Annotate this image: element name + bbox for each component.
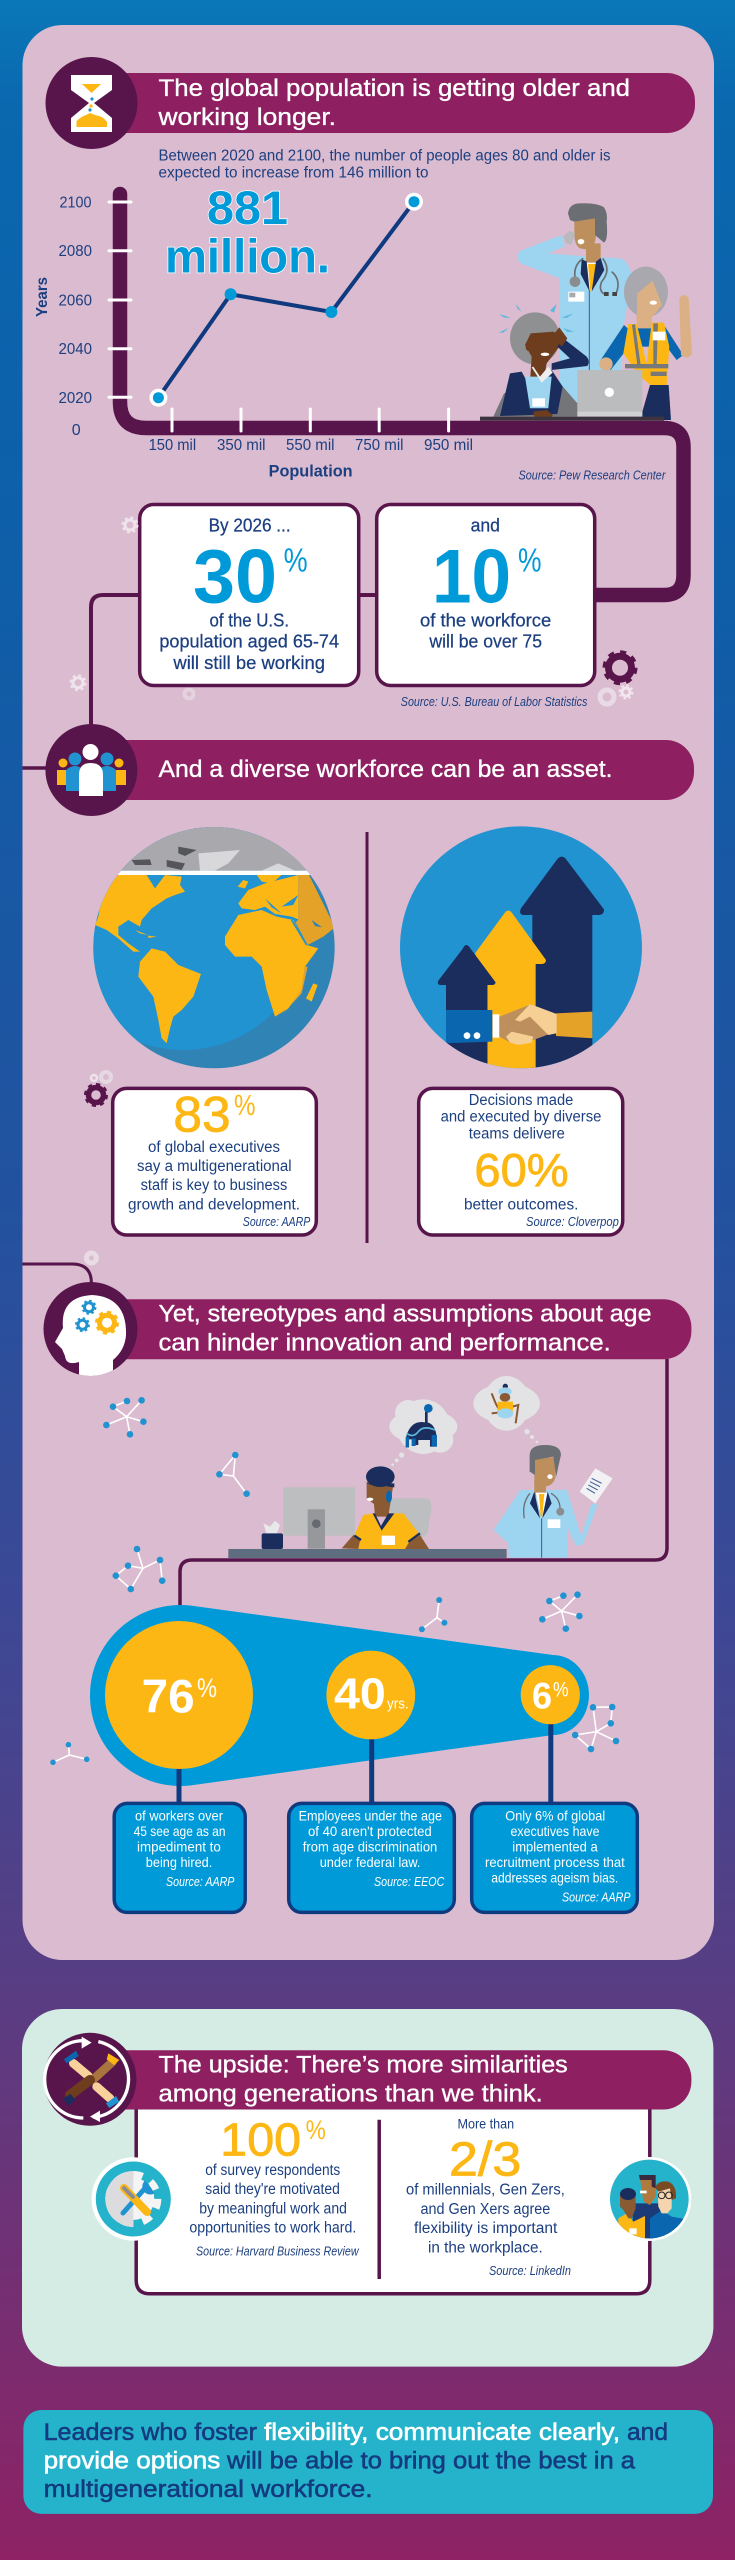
heading text: The global population is getting older and (158, 75, 630, 102)
text box: employees under 40 (289, 1803, 454, 1912)
stat: 100 percent: of survey respondents (205, 2162, 341, 2179)
thought bubble: dinosaur (389, 1399, 457, 1466)
chart: tapering funnel of statistics (90, 1605, 619, 1802)
callout: closing message (23, 2410, 713, 2514)
stat: 100 percent: said they're motivated (205, 2181, 340, 2198)
callout: closing message: multigenerational workforce. (44, 2476, 373, 2503)
stat box: 60 percent (419, 1088, 623, 1235)
icon: gear with tools (92, 2157, 175, 2241)
stat box: 83 percent: of global executives (148, 1139, 280, 1156)
illustration: globe (93, 827, 335, 1068)
thought bubble: baby (473, 1376, 540, 1443)
data line (149, 193, 423, 407)
stat: 100 percent: % (306, 2115, 326, 2145)
circle: 6 percent (521, 1665, 580, 1724)
stat box: 30 percent: 30 (193, 535, 277, 620)
decorative gears (70, 518, 194, 698)
icon: head with gears (55, 1295, 126, 1380)
circle: 6 percent: 6 (532, 1675, 552, 1716)
nurse at desk (342, 1466, 431, 1549)
stat box: 83 percent: 83 (173, 1087, 231, 1143)
heading text: Yet, stereotypes and assumptions about age (158, 1301, 652, 1328)
icon: three generations team (607, 2157, 691, 2243)
x axis labels: 550 mil (286, 437, 334, 454)
stat: two thirds: of millennials, Gen Zers, (406, 2182, 565, 2199)
doctor on phone (517, 203, 632, 407)
stat: two thirds: 2/3 (449, 2133, 521, 2186)
stat box: 83 percent: % (234, 1090, 256, 1122)
panel: the upside (22, 2009, 713, 2367)
molecule dots (50, 1397, 583, 1765)
heading text: working longer. (157, 104, 336, 131)
panel: aging workforce and diversity (22, 25, 714, 1960)
stat: two thirds: More than (458, 2116, 514, 2132)
stat: 100 percent: opportunities to work hard. (189, 2220, 356, 2237)
desk (228, 1549, 507, 1558)
illustration: three stressed workers (480, 203, 692, 421)
y axis labels (58, 194, 92, 439)
tissue box (262, 1521, 283, 1549)
source: U.S. Bureau of Labor Statistics: Source: U.S. Bureau of Labor Statistics (401, 695, 587, 709)
line chart: population over years (34, 193, 684, 595)
circle: 76 percent: % (197, 1673, 217, 1703)
y axis title: Years (34, 277, 51, 317)
text box: workers over 45: being hired. (146, 1854, 212, 1870)
handshake (446, 1004, 592, 1045)
heading text: among generations than we think. (158, 2080, 543, 2107)
text box: employees under 40: of 40 aren't protected (308, 1823, 432, 1839)
text box: employees under 40: Source: EEOC (374, 1875, 445, 1889)
stat box: 30 percent: of the U.S. (210, 611, 289, 631)
callout: closing message: flexibility, communicate clearly, (264, 2419, 620, 2446)
stat box: 83 percent: Source: AARP (243, 1215, 311, 1229)
text box: workers over 45: 45 see age as an (134, 1823, 226, 1839)
heading text: The upside: There’s more similarities (158, 2052, 568, 2078)
callout: closing message: will be able to bring out the best in a (226, 2448, 636, 2475)
circle: 40 years (326, 1651, 415, 1739)
doctor with clipboard (494, 1445, 613, 1558)
y axis labels: 2040 (58, 341, 92, 358)
woman in safety vest (599, 267, 692, 420)
y axis labels: 2020 (58, 390, 92, 407)
stat box: 60 percent: better outcomes. (464, 1196, 578, 1213)
divider (366, 832, 368, 1243)
stat box: 10 percent (377, 504, 595, 686)
laptop (554, 370, 642, 417)
stat box: 60 percent: Decisions made (469, 1092, 573, 1109)
callout: closing message: provide options (44, 2448, 220, 2475)
big number: 881 million: million. (165, 230, 330, 283)
icon: hourglass (71, 75, 112, 132)
stat box: 10 percent: % (518, 542, 542, 579)
stat: two thirds (406, 2116, 571, 2278)
stat box: 10 percent: will be over 75 (428, 632, 542, 652)
stat box: 83 percent: growth and development. (128, 1196, 300, 1213)
heading text: can hinder innovation and performance. (158, 1330, 611, 1357)
text box: recruitment process (472, 1803, 637, 1912)
text box: workers over 45: impediment to (137, 1839, 221, 1855)
section: upside heading (44, 2033, 691, 2126)
intro text (158, 148, 611, 182)
x axis labels: 350 mil (217, 437, 266, 454)
y axis labels: 2100 (60, 194, 92, 212)
stat box: 60 percent: 60% (474, 1144, 569, 1196)
circle: 40 years: yrs. (387, 1695, 409, 1712)
connector from panel edge to section two icon (22, 766, 50, 770)
heading text (158, 1301, 652, 1357)
monitor (283, 1487, 355, 1549)
decorative gear (86, 1253, 96, 1263)
continents (95, 875, 318, 1043)
stat: 100 percent (189, 2113, 359, 2259)
callout: closing message: Leaders who foster (44, 2419, 257, 2446)
text box: recruitment process: implemented a (512, 1839, 598, 1855)
intro text: expected to increase from 146 million to (158, 165, 428, 182)
y axis labels: 2060 (58, 292, 92, 310)
stat: 100 percent: Source: Harvard Business Review (196, 2245, 359, 2259)
circle: 76 percent: 76 (142, 1669, 195, 1722)
white stat box (136, 2100, 650, 2294)
x axis labels (149, 437, 473, 454)
stat box: 30 percent: will still be working (172, 653, 325, 673)
circle: 40 years: 40 (334, 1669, 386, 1718)
stat: two thirds: and Gen Xers agree (420, 2201, 550, 2218)
stat box: 10 percent: 10 (432, 535, 511, 620)
stat box: 60 percent: teams delivere (469, 1125, 565, 1142)
stat: 100 percent: by meaningful work and (199, 2200, 347, 2217)
icon: joined hands with arrows (45, 2037, 129, 2122)
connector into section three (22, 1264, 91, 1283)
text box: recruitment process: executives have (510, 1823, 600, 1839)
circle: 6 percent: % (553, 1679, 569, 1702)
x axis title: Population (269, 462, 353, 481)
text box: workers over 45: Source: AARP (166, 1875, 235, 1889)
section: diverse workforce heading (45, 724, 694, 816)
heading text: And a diverse workforce can be an asset. (158, 756, 612, 783)
desk (480, 417, 664, 421)
stat: two thirds: in the workplace. (428, 2239, 543, 2256)
icon: gear cluster right (600, 652, 636, 704)
big number: 881 million (165, 181, 330, 283)
text box: recruitment process: Only 6% of global (505, 1808, 605, 1824)
illustration: office scene with thought bubbles (228, 1376, 613, 1558)
text box: employees under 40: under federal law. (320, 1854, 420, 1870)
text box: recruitment process: recruitment process that (485, 1854, 625, 1870)
molecule decorations (53, 1400, 579, 1762)
stat box: 10 percent: of the workforce (420, 611, 551, 631)
text box: workers over 45 (114, 1803, 245, 1912)
illustration: arrows and handshake (400, 826, 642, 1080)
text box: recruitment process: Source: AARP (562, 1891, 631, 1905)
y axis labels: 0 (72, 422, 81, 439)
x axis labels: 150 mil (149, 437, 196, 454)
source: Pew Research Center: Source: Pew Research Center (518, 468, 666, 482)
big number: 881 million: 881 (207, 181, 288, 234)
heading text (158, 2052, 568, 2107)
circle: 76 percent (105, 1621, 253, 1769)
callout: closing message: and (627, 2419, 668, 2446)
stat: two thirds: flexibility is important (414, 2220, 558, 2237)
intro text: Between 2020 and 2100, the number of people ages 80 and older is (158, 148, 611, 165)
section: population heading (46, 57, 695, 149)
text box: workers over 45: of workers over (135, 1808, 223, 1824)
stat box: 60 percent: Source: Cloverpop (526, 1215, 619, 1229)
y axis labels: 2080 (58, 243, 92, 260)
icon: gear cluster left (86, 1072, 111, 1106)
section: stereotypes heading (44, 1282, 691, 1380)
stat box: 30 percent: population aged 65-74 (159, 632, 339, 652)
stat box: 10 percent: and (471, 516, 500, 536)
stems (179, 1720, 551, 1802)
stat box: 83 percent: staff is key to business (141, 1177, 288, 1194)
stat box: 83 percent: say a multigenerational (137, 1158, 292, 1175)
heading text (157, 75, 630, 131)
text box: recruitment process: addresses ageism bias. (491, 1870, 618, 1886)
stat: 100 percent: 100 (220, 2113, 301, 2165)
connector line to section two (91, 595, 375, 725)
stat: two thirds: Source: LinkedIn (489, 2264, 571, 2278)
x axis labels: 750 mil (355, 437, 404, 454)
molecule overlapping funnel (572, 1704, 619, 1752)
stat box: 30 percent: % (284, 542, 308, 579)
text box: employees under 40: Employees under the age (299, 1808, 442, 1824)
divider (377, 2120, 381, 2279)
stat box: 30 percent (140, 504, 359, 686)
stat box: 83 percent (113, 1087, 316, 1235)
stat box: 60 percent: and executed by diverse (441, 1109, 601, 1126)
stat box: 30 percent: By 2026 ... (209, 516, 291, 536)
text box: employees under 40: from age discrimination (303, 1839, 437, 1855)
polar cap (121, 827, 307, 871)
icon: people group (57, 744, 126, 796)
connector from section three to funnel (180, 1359, 667, 1606)
seated woman (493, 304, 589, 421)
x axis labels: 950 mil (424, 437, 473, 454)
